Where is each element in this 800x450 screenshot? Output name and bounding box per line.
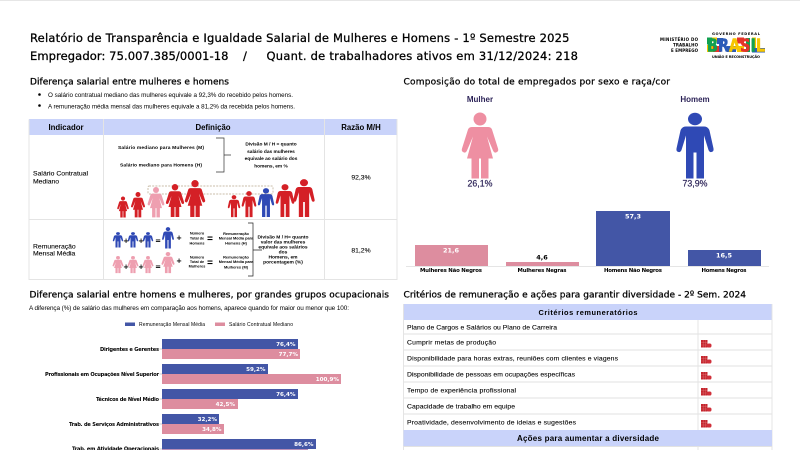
title: Quant. de trabalhadores ativos em 31/12/2024: 218 <box>266 49 578 63</box>
icons: homens mediana <box>228 179 315 217</box>
dashed median box <box>148 186 273 194</box>
title: Empregador: 75.007.385/0001-18 <box>30 49 228 63</box>
table header: ações: Ações para aumentar a diversidade <box>517 434 660 443</box>
bullet list <box>38 92 295 110</box>
equation: homens: Total de <box>190 236 204 240</box>
group: dirigentes: Dirigentes e Gerentes <box>100 347 159 353</box>
definition labels: Salário mediano para Homens (H) <box>120 162 202 168</box>
bar chart: composição por sexo e raça/cor: Mulheres Não Negros <box>420 268 482 274</box>
group: técnicos: 42,5% <box>216 402 235 408</box>
equation: mulheres: + <box>176 257 182 265</box>
definition text <box>258 234 308 266</box>
group: profissionais: 59,2% <box>246 367 266 373</box>
bar chart: composição por sexo e raça/cor: Homens Negros <box>702 268 746 274</box>
equation: homens: + <box>176 234 182 242</box>
value: 92,3%: 92,3% <box>351 174 371 182</box>
bar chart: composição por sexo e raça/cor <box>406 211 769 274</box>
row labels: Disponibilidade para horas extras, reuniões com clientes e viagens <box>407 355 619 362</box>
logo: ministério e governo federal: BRASIL <box>707 36 765 56</box>
row labels: Proatividade, desenvolvimento de ideias e sugestões <box>407 419 577 426</box>
equation: homens: Mensal Média para <box>219 236 254 240</box>
definition text: equivale aos salários <box>258 244 308 250</box>
heading: composição: Composição do total de empregados por sexo e raça/cor <box>404 78 670 88</box>
table header: Critérios remuneratórios <box>538 308 638 317</box>
definition text: homens, em % <box>254 164 289 170</box>
definition labels: Salário mediano para Mulheres (M) <box>118 145 204 151</box>
panel: critérios remuneratórios <box>404 304 772 450</box>
equation: homens: + <box>138 237 144 245</box>
definition text: Homens, em <box>268 254 298 260</box>
group: profissionais: 100,9% <box>316 377 339 383</box>
definition text <box>245 142 298 170</box>
equation: mulheres: Mulheres <box>189 264 205 268</box>
group: dirigentes: 77,7% <box>279 352 298 358</box>
table header: Razão M/H <box>341 123 381 132</box>
logo: ministério e governo federal: E EMPREGO <box>671 48 699 53</box>
group: dirigentes <box>100 339 300 359</box>
definition labels <box>118 145 204 168</box>
pictogram: mulher: Mulher <box>467 95 493 104</box>
logo: ministério e governo federal: TRABALHO <box>673 42 699 48</box>
equation: homens: Homens (H) <box>225 240 248 246</box>
row labels: Cumprir metas de produção <box>407 339 496 346</box>
equation: mulheres: + <box>123 263 129 271</box>
pictogram: mulher: 26,1% <box>468 178 493 188</box>
subtitle: A diferença (%) de salário das mulheres em comparação aos homens, aparece quando for maior ou menor que 100: <box>29 305 349 312</box>
bar chart: composição por sexo e raça/cor: Homens Não Negros <box>604 268 662 274</box>
equation: mulheres: Número <box>190 256 205 260</box>
table header: ações <box>404 430 772 446</box>
logo: ministério e governo federal: MINISTÉRIO DO <box>660 37 699 42</box>
legend: Remuneração Mensal Média <box>139 322 205 328</box>
equation: homens: Número <box>190 232 205 236</box>
group: serviços administrativos: 34,8% <box>202 427 222 433</box>
equation: homens: + <box>123 237 129 245</box>
row label: remuneração <box>33 244 76 258</box>
bar chart: composição por sexo e raça/cor: Mulheres Negras <box>518 268 566 274</box>
title: Relatório de Transparência e Igualdade Salarial de Mulheres e Homens - 1º Semestre 2025 <box>30 31 570 45</box>
pictogram: homem <box>676 95 714 188</box>
equation: mulheres: Mulheres (M) <box>224 264 249 270</box>
group: técnicos: 76,4% <box>276 392 296 398</box>
equation: mulheres: + <box>138 263 144 271</box>
definition text: salário das mulheres <box>247 149 295 155</box>
bar chart: composição por sexo e raça/cor: 16,5 <box>716 252 732 260</box>
group: serviços administrativos <box>69 414 224 434</box>
definition text: Divisão M / H = quanto <box>245 142 297 148</box>
legend: Salário Contratual Mediano <box>229 322 293 328</box>
bar chart: composição por sexo e raça/cor: 4,6 <box>536 254 548 262</box>
definition text: porcentagem (%) <box>263 260 303 266</box>
equation: homens <box>113 227 254 248</box>
logo: ministério e governo federal <box>660 32 765 59</box>
row label: remuneração: Remuneração <box>33 244 76 250</box>
group: técnicos: Técnicos de Nível Médio <box>96 396 160 403</box>
definition text: equivale ao salário dos <box>245 156 298 162</box>
equation: homens: = <box>155 237 161 245</box>
group: técnicos <box>96 389 298 409</box>
bracket <box>248 223 262 276</box>
title <box>30 31 578 63</box>
bar chart: grupos ocupacionais <box>45 339 341 450</box>
row labels: Disponibilidade de pessoas em ocupações específicas <box>407 371 576 378</box>
equation: mulheres: Mensal Média para <box>219 259 254 264</box>
bracket <box>216 138 231 172</box>
legend <box>125 322 293 328</box>
row label: salário contratual: Salário Contratual <box>33 170 88 178</box>
group: serviços administrativos: 32,2% <box>198 417 217 423</box>
bar chart: composição por sexo e raça/cor: 57,3 <box>625 212 641 220</box>
panel: tabela de indicadores <box>29 119 397 280</box>
row label: remuneração: Mensal Média <box>33 250 76 258</box>
table header: Indicador <box>48 123 84 132</box>
equation: mulheres: Total de <box>190 260 204 264</box>
row labels: Capacidade de trabalho em equipe <box>407 403 515 410</box>
group: dirigentes: 76,4% <box>276 342 296 348</box>
value: 81,2%: 81,2% <box>351 248 371 254</box>
equation: homens: Homens <box>190 242 204 246</box>
table header <box>29 119 397 135</box>
logo: ministério e governo federal: UNIÃO E RECONSTRUÇÃO <box>712 54 760 59</box>
row labels <box>407 324 619 426</box>
row labels: Plano de Cargos e Salários ou Plano de Carreira <box>407 324 557 331</box>
definition text: Divisão M / H= quanto <box>258 234 308 240</box>
heading: diferença salarial: Diferença salarial entre mulheres e homens <box>30 78 229 88</box>
group: atividade operacionais <box>72 439 316 450</box>
group: profissionais: Profissionais em Ocupações Nível Superior <box>45 371 159 378</box>
group: atividade operacionais: 86,6% <box>294 442 314 448</box>
definition text: dos <box>279 250 288 256</box>
bullet list: A remuneração média mensal das mulheres equivale a 81,2% da recebida pelos homens. <box>48 104 295 110</box>
pictogram: mulher <box>462 95 498 188</box>
heading: grandes grupos ocupacionais: Diferença salarial entre homens e mulheres, por grandes grupos ocupacionais <box>30 290 389 300</box>
definition text: valor das mulheres <box>261 240 306 246</box>
group: profissionais <box>45 364 341 384</box>
equation: mulheres: = <box>155 263 161 271</box>
icons: mulheres mediana <box>117 180 205 217</box>
table header: Definição <box>195 123 231 132</box>
group: serviços administrativos: Trab. de Serviços Administrativos <box>69 422 159 428</box>
icons: critério marcado <box>701 340 712 428</box>
equation: mulheres: Remuneração <box>223 254 249 260</box>
logo: ministério e governo federal: GOVERNO FEDERAL <box>712 32 761 36</box>
row labels: Tempo de experiência profissional <box>407 387 516 394</box>
heading: critérios: Critérios de remuneração e ações para garantir diversidade - 2º Sem. 2024 <box>404 290 746 300</box>
row label: salário contratual <box>33 170 88 186</box>
pictogram: homem: Homem <box>680 95 710 104</box>
bullet list: O salário contratual mediano das mulheres equivale a 92,3% do recebido pelos homens. <box>48 92 293 99</box>
title: / <box>243 49 247 63</box>
equation: homens: Remuneração <box>223 231 249 236</box>
bar chart: composição por sexo e raça/cor: 21,6 <box>443 246 459 254</box>
table header <box>404 304 772 320</box>
equation: mulheres <box>113 252 254 273</box>
row label: salário contratual: Mediano <box>33 178 59 186</box>
pictogram: homem: 73,9% <box>683 178 708 188</box>
